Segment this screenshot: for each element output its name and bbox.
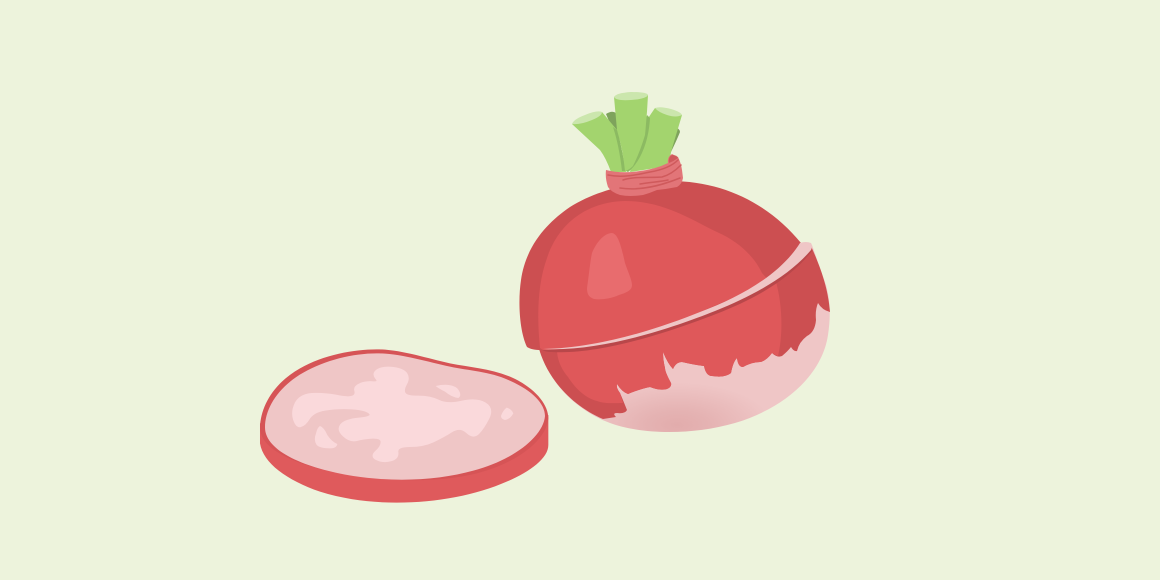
collar of wrapped skin: [606, 154, 683, 196]
right stem cut end: [655, 107, 682, 116]
cap: lighter red area: [538, 201, 770, 350]
middle stem: [614, 95, 648, 171]
stem shadow creases: [613, 115, 650, 172]
radish: [519, 92, 830, 432]
slice pale fleck: right dot: [501, 408, 513, 420]
collar back: [669, 155, 678, 163]
collar wrinkles: [608, 160, 681, 189]
lower skin: dark red torn peel: [530, 246, 830, 419]
right stem: [630, 108, 682, 172]
slice side wall: [260, 407, 548, 503]
slice face: [265, 353, 545, 480]
middle stem cut end: [614, 92, 648, 100]
slice pale fleck: lower left: [315, 426, 337, 448]
back leaf stems: [606, 112, 680, 158]
slice pale fleck: upper right: [436, 385, 460, 398]
slice pale flesh pattern: [293, 368, 490, 461]
cut rim shadow: [541, 248, 812, 352]
stems: [572, 92, 682, 172]
collar wrap: [606, 154, 683, 196]
cap highlight: [587, 233, 632, 299]
cut rim highlight: [543, 242, 812, 349]
lower skin: peeled pale base: [530, 245, 830, 432]
left stem cut end: [572, 111, 602, 124]
lower skin: lighter red area: [540, 278, 781, 403]
left stem: [572, 112, 626, 172]
slice top rim: [260, 349, 548, 480]
cap: dark red top half: [519, 181, 801, 350]
radish slice: [260, 349, 548, 503]
